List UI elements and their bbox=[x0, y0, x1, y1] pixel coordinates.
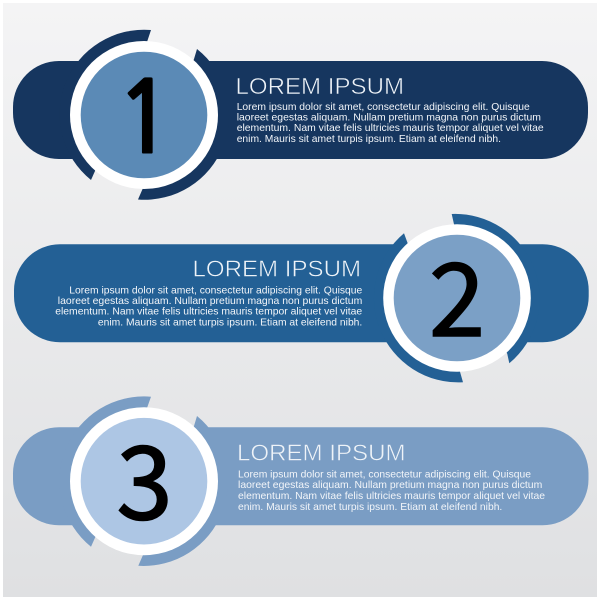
text block: step 2: elementum. Nam vitae felis ultricies mauris tempor aliquet vel vitae bbox=[55, 305, 362, 317]
panel: step 3 bbox=[13, 396, 588, 566]
ring: step 3 bbox=[70, 407, 218, 555]
heading: step 3: LOREM IPSUM bbox=[237, 440, 406, 466]
text block: step 1: laoreet egestas aliquam. Nullam pretium magna non purus dictum bbox=[237, 112, 541, 124]
text block: step 1: enim. Mauris sit amet turpis ipsum. Etiam at eleifend nibh. bbox=[237, 133, 501, 145]
arc: step 3 lower right bbox=[138, 416, 228, 566]
arc: step 3 upper left bbox=[60, 396, 151, 547]
heading: step 1: LOREM IPSUM bbox=[236, 73, 404, 99]
number 3: 3 bbox=[116, 403, 173, 549]
number 2: 2 bbox=[429, 220, 485, 366]
ring: step 2 bbox=[383, 224, 531, 372]
ring: step 1 bbox=[70, 41, 218, 189]
text block: step 2: enim. Mauris sit amet turpis ipsum. Etiam at eleifend nibh. bbox=[98, 316, 362, 328]
text block: step 3: laoreet egestas aliquam. Nullam pretium magna non purus dictum bbox=[238, 479, 543, 491]
text block: step 3: Lorem ipsum dolor sit amet, consectetur adipiscing elit. Quisque bbox=[238, 469, 531, 481]
arc: step 2 upper right bbox=[452, 214, 540, 363]
text block: step 1: Lorem ipsum dolor sit amet, consectetur adipiscing elit. Quisque bbox=[237, 101, 530, 113]
text block: step 3: elementum. Nam vitae felis ultricies mauris tempor aliquet vel vitae bbox=[238, 490, 545, 502]
banner 3 bbox=[13, 427, 588, 525]
text block: step 3: enim. Mauris sit amet turpis ipsum. Etiam at eleifend nibh. bbox=[238, 501, 502, 513]
arc: step 2 lower left bbox=[374, 233, 463, 382]
number 1: 1 bbox=[115, 69, 175, 168]
arc: step 1 lower right bbox=[138, 49, 229, 200]
heading: step 2: LOREM IPSUM bbox=[192, 256, 361, 282]
text block: step 2: laoreet egestas aliquam. Nullam pretium magna non purus dictum bbox=[58, 295, 363, 307]
arc: step 1 upper left bbox=[60, 30, 151, 180]
banner 1 bbox=[13, 61, 588, 159]
panel: step 1 bbox=[13, 30, 588, 200]
text block: step 2 bbox=[55, 284, 363, 328]
text block: step 1 bbox=[237, 101, 544, 145]
banner 2 bbox=[14, 244, 589, 342]
disc: step 3 bbox=[81, 418, 207, 544]
text block: step 3 bbox=[238, 469, 545, 513]
text block: step 1: elementum. Nam vitae felis ultricies mauris tempor aliquet vel vitae bbox=[237, 122, 544, 134]
text block: step 2: Lorem ipsum dolor sit amet, consectetur adipiscing elit. Quisque bbox=[69, 284, 362, 296]
disc: step 2 bbox=[394, 235, 520, 361]
panel: step 2 bbox=[14, 214, 589, 382]
disc: step 1 bbox=[81, 52, 207, 178]
